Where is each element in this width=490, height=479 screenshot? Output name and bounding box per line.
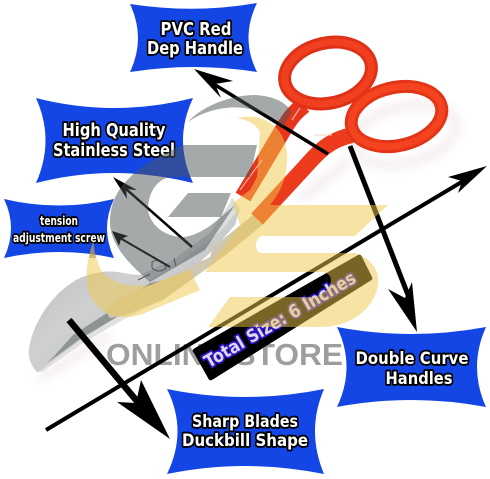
online store watermark text: ONLINE STORE <box>106 337 343 372</box>
panel: double curve handles <box>337 327 486 407</box>
arrow: tension screw <box>112 231 170 267</box>
size badge <box>193 255 372 380</box>
yellow S mark <box>87 117 388 327</box>
blade cutting edge <box>38 295 160 372</box>
scissors <box>29 34 448 372</box>
label: dep handle: Dep Handle <box>147 39 243 59</box>
handle shadow <box>40 96 462 378</box>
label: handles: Handles <box>386 369 452 389</box>
label: stainless steel: Stainless Steel <box>53 141 175 161</box>
label: PVC red: PVC Red <box>160 20 232 40</box>
arrow: double curve handles <box>350 146 417 332</box>
label: tension: tension <box>40 213 78 228</box>
badge text: Total Size: 6 Inches <box>201 268 360 373</box>
tension adjustment screw <box>138 258 176 280</box>
handle highlights <box>240 108 332 190</box>
loop 2 <box>345 78 448 155</box>
loop 1 <box>278 34 378 112</box>
label: duckbill shape: Duckbill Shape <box>182 431 308 451</box>
label: adjustment screw: adjustment screw <box>13 230 105 245</box>
panel: tension adjustment screw <box>4 199 114 258</box>
panel: PVC red dip handle <box>130 3 257 72</box>
arrow: PVC handle <box>194 69 328 154</box>
gray C mark <box>89 95 292 282</box>
label: high quality: High Quality <box>62 121 166 141</box>
logo watermark <box>87 95 388 327</box>
panel: sharp blades duckbill shape <box>167 389 324 474</box>
arrow: stainless steel <box>113 177 192 247</box>
panel: high quality stainless steel <box>36 98 193 183</box>
arrow: total size dimension <box>46 166 487 430</box>
arrow: sharp blades <box>69 320 170 439</box>
gold-toned lower arm <box>105 215 265 318</box>
blade: duckbill <box>29 198 240 372</box>
handle arm 1 <box>243 105 304 197</box>
handle arm 2 <box>257 135 352 219</box>
label: double curve: Double Curve <box>356 349 468 369</box>
label: sharp blades: Sharp Blades <box>192 412 298 432</box>
blade neck <box>140 198 240 280</box>
blade bevel <box>47 280 165 363</box>
